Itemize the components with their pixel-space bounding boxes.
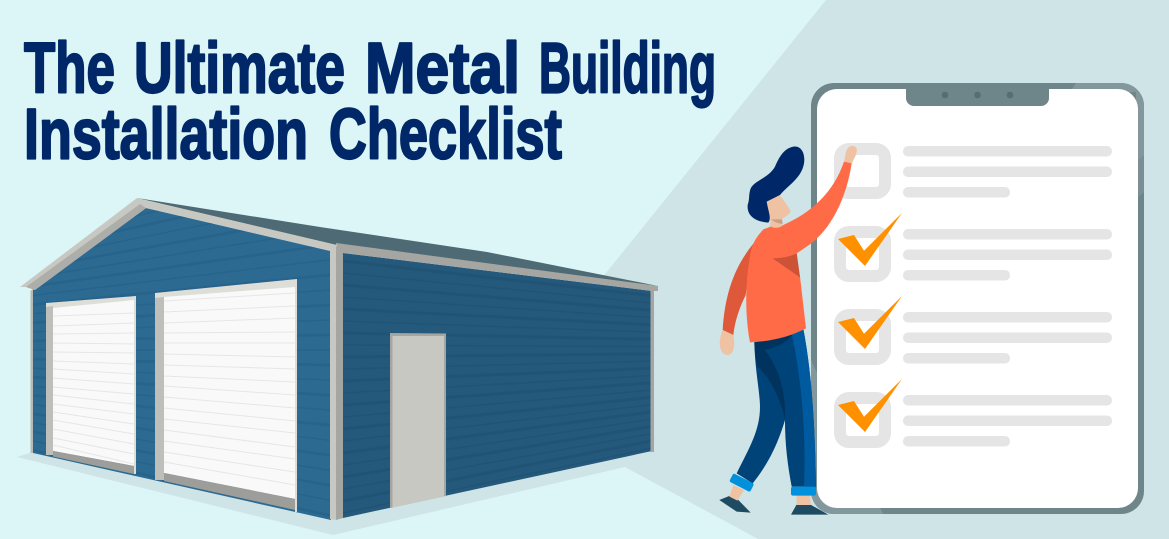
side wall <box>343 253 652 518</box>
centre corner post <box>330 246 343 520</box>
checklist item 1 <box>840 146 1112 198</box>
title: Building <box>539 28 716 108</box>
back arm <box>723 242 755 335</box>
tablet frame <box>811 83 1144 514</box>
title: Metal <box>365 28 520 108</box>
clipboard tablet <box>811 83 1144 514</box>
raised hand <box>844 146 857 164</box>
title <box>24 28 716 174</box>
side door <box>390 333 446 508</box>
garage door large <box>155 279 297 512</box>
checklist item 2 <box>838 213 1112 280</box>
shirt <box>746 162 852 342</box>
neck and face <box>765 196 791 230</box>
checkmark 4 <box>838 379 902 432</box>
title: Installation <box>24 94 308 174</box>
front gable wall <box>33 208 331 520</box>
checkmark 3 <box>838 296 902 349</box>
title: Checklist <box>329 94 562 174</box>
garage door small <box>46 296 136 474</box>
title: The <box>24 28 115 108</box>
left corner post <box>30 289 33 453</box>
cuffs <box>729 473 816 496</box>
checklist item 3 <box>838 296 1112 364</box>
shirt shadow <box>773 253 800 277</box>
checklist item 4 <box>838 379 1112 446</box>
pants <box>737 329 816 487</box>
ankles <box>729 485 811 505</box>
background diagonal panel <box>560 0 1169 539</box>
tablet notch <box>906 88 1049 106</box>
side eave trim <box>336 243 658 291</box>
tablet screen <box>817 89 1138 508</box>
gable trim <box>20 198 337 290</box>
right corner post <box>650 291 654 452</box>
roof <box>137 198 658 286</box>
title: Ultimate <box>134 28 345 108</box>
person <box>719 146 857 515</box>
hair <box>748 147 804 223</box>
left hand <box>720 330 734 355</box>
building ground shadow <box>17 451 652 535</box>
shoes <box>719 495 828 515</box>
checkmark 2 <box>838 213 902 266</box>
metal building <box>18 198 658 535</box>
